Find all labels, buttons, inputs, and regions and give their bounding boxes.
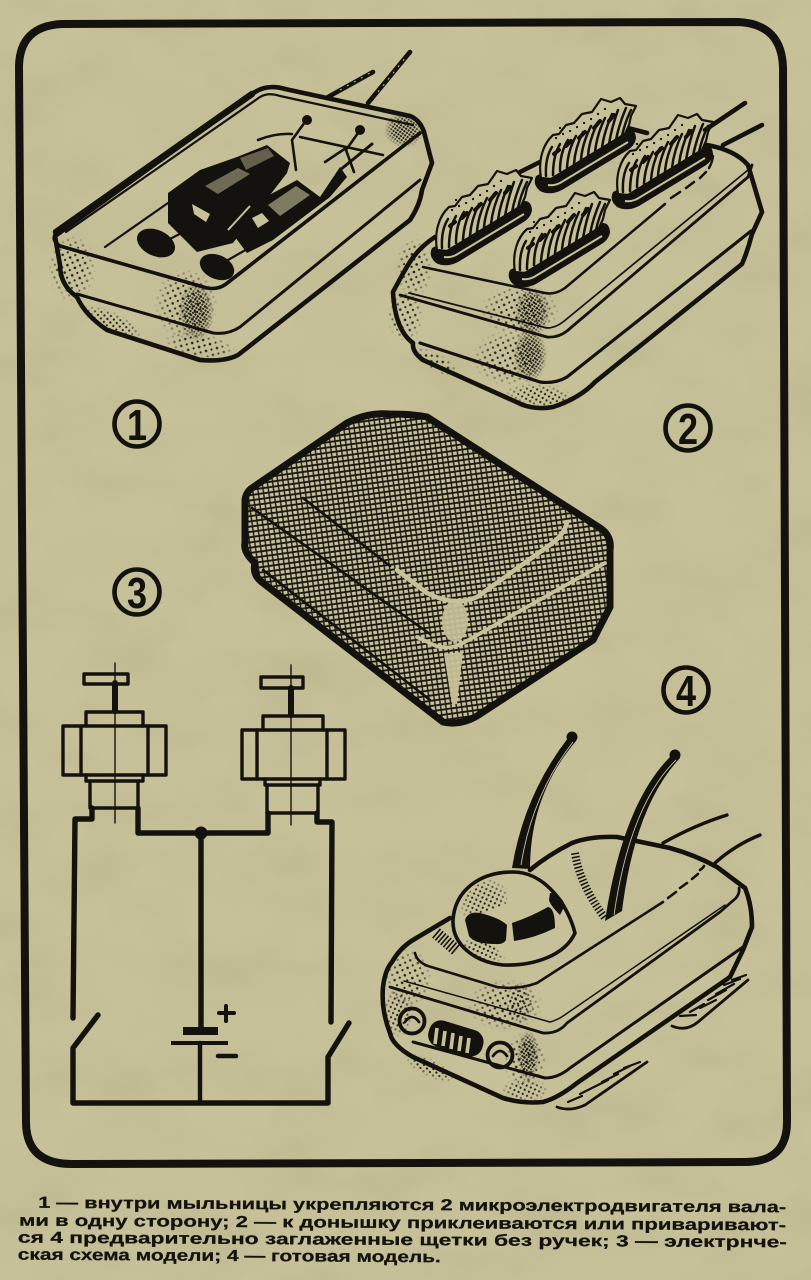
figure 1: open soap dish with motors — [48, 52, 432, 365]
hatched shadow at dome — [436, 933, 456, 950]
model body outline — [383, 837, 752, 1102]
antennas — [512, 732, 680, 921]
stipple shading of model — [383, 948, 549, 1102]
number 2: 2 — [678, 405, 698, 454]
wiring — [73, 808, 349, 1103]
caption text: ся 4 предварительно заглаженные щетки без ручек; 3 — электрнче- — [18, 1230, 787, 1251]
left motor — [63, 663, 166, 823]
number 1: 1 — [127, 401, 147, 450]
battery symbol — [171, 1006, 236, 1056]
stipple shading of dish 2 — [387, 238, 577, 412]
number 4: 4 — [676, 667, 697, 716]
junction dot — [194, 826, 208, 840]
twisted wires of dish 1 — [328, 52, 410, 103]
figure 4: finished model — [383, 732, 760, 1109]
number 3 — [114, 569, 160, 618]
figure 2: soap dish with four brushes — [387, 98, 762, 412]
dish 1 outline — [54, 87, 432, 360]
caption text — [18, 1195, 787, 1268]
caption text: 1 — внутри мыльницы укрепляются 2 микроэлектродвигателя вала- — [38, 1195, 786, 1216]
headlights and grille — [400, 1008, 512, 1068]
caption text: ми в одну сторону; 2 — к донышку приклеиваются или приваривают- — [19, 1213, 786, 1234]
number 4 — [664, 667, 708, 716]
figure 3: electrical circuit — [63, 663, 349, 1103]
figure 3: mesh covered closed soap dish — [245, 414, 610, 723]
number 3: 3 — [127, 569, 147, 618]
dome — [453, 872, 575, 965]
twisted wires of model — [663, 815, 760, 863]
right motor — [242, 665, 345, 825]
caption text: ская схема модели; 4 — готовая модель. — [18, 1247, 441, 1266]
number 1 — [114, 401, 160, 450]
number 2 — [666, 405, 710, 454]
stipple shading of dish 1 — [48, 112, 424, 365]
light contour lines — [397, 522, 605, 704]
brushes — [431, 98, 713, 287]
motors inside dish 1 — [105, 115, 383, 285]
twisted wires of dish 2 — [705, 103, 762, 145]
dish 2 outline — [393, 128, 762, 408]
brush bristles under model — [557, 975, 748, 1109]
